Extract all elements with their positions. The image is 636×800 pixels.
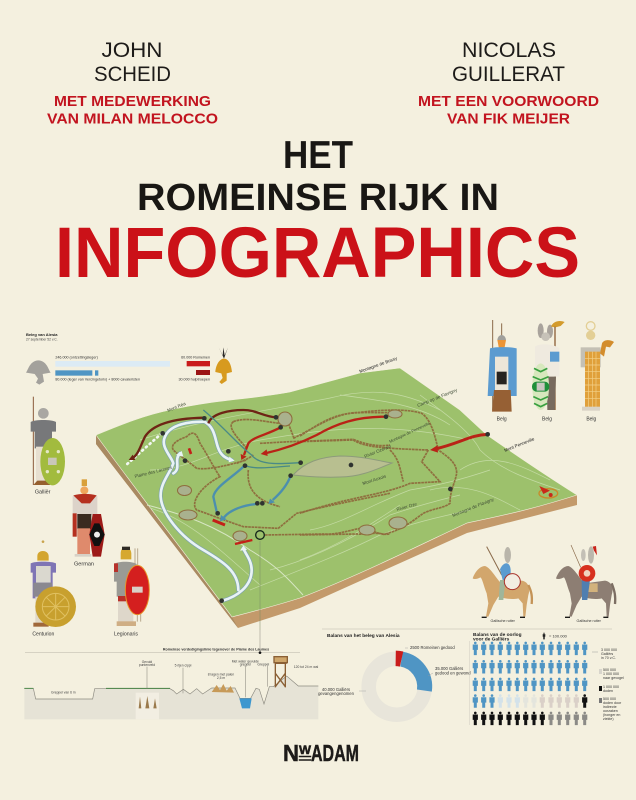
chart: beleg van Alesia troop numbers: 30.000 hulptroepen [178, 377, 210, 381]
cross-section of Roman defence line: 120 tot 24 m wal [294, 665, 318, 669]
cross-section of Roman defence line [24, 630, 318, 719]
author: Nicolas Guillerat: NICOLAS [462, 39, 556, 62]
cross-section of Roman defence line: 8 lagen met palen [208, 672, 234, 676]
rider: tan horse [473, 547, 532, 623]
chart: beleg van Alesia troop numbers [26, 332, 232, 385]
soldier: Legionaris: Legionaris [114, 631, 138, 637]
red arrow from the east [430, 432, 558, 498]
soldier: Legionaris [114, 547, 149, 637]
divider line right [322, 628, 612, 630]
map labels: Mont Réa [167, 401, 187, 413]
chart: beleg van Alesia troop numbers: 27 september 52 v.C. [26, 338, 58, 342]
plateau Alesia [293, 456, 392, 477]
contour lines [140, 392, 560, 595]
people rows: blue [473, 642, 587, 655]
stimuli pit [136, 693, 159, 719]
credit: voorwoord: MET EEN VOORWOORD [418, 93, 599, 110]
cross-section of Roman defence line: greppel [240, 663, 251, 667]
chart: beleg van Alesia troop numbers: 80.000 (leger van Vercingetorix) + 8000 cavaleristen [55, 377, 140, 381]
map labels: Camp op de Flavigny [417, 387, 458, 408]
publisher logo: ADAM [311, 740, 359, 766]
soldiers: left column [31, 397, 149, 637]
author: John Scheid: JOHN [102, 39, 162, 62]
title: ROMEINSE RIJK IN [137, 177, 499, 219]
rivers [125, 422, 252, 601]
bead line [125, 433, 162, 466]
cross-section of Roman defence line: Gevuld [142, 660, 152, 664]
author: John Scheid: SCHEID [94, 63, 171, 86]
map labels: Plaine des Laumes [134, 465, 173, 479]
chart: beleg van Alesia troop numbers: 60.000 Romeinen [181, 356, 210, 360]
publisher logo: W [299, 743, 312, 757]
pictogram legend: doden door [603, 701, 622, 705]
credit: voorwoord: VAN FIK MEIJER [447, 110, 570, 128]
chart: beleg van Alesia troop numbers: Beleg van Alesia [26, 332, 58, 337]
numbered markers [160, 414, 388, 603]
chart: verliezen donut: gevangengenomen [318, 691, 355, 696]
brushwood [212, 684, 234, 693]
map labels: Montagne de Pennevelle [388, 420, 431, 444]
cross-section of Roman defence line: puntenveld [139, 663, 155, 667]
donut segment: Gauls dead [402, 659, 425, 691]
soldier: Centurion: Centurion [32, 631, 54, 637]
cross-section of Roman defence line: Romeinse verdedigingslinie tegenover de Plaine des Laumes [163, 648, 269, 652]
author: Nicolas Guillerat [452, 39, 565, 86]
publisher logo [283, 740, 359, 766]
map block side [96, 435, 577, 628]
pictogram legend: 1 000 000 [603, 672, 619, 676]
camps [178, 410, 407, 541]
credit: met medewerking: VAN MILAN MELOCCO [47, 110, 218, 128]
map labels [134, 355, 536, 518]
rider: tan horse: Gallische ruiter [490, 619, 516, 623]
soldier: Belg with checked tunic: Belg [586, 417, 596, 423]
pictogram legend: Galliërs [601, 652, 613, 656]
soldier: Galliër [31, 397, 65, 496]
water ditch [239, 698, 252, 708]
map labels: Mont Auxois [362, 473, 387, 486]
pictogram legend: indirecte [603, 705, 617, 709]
red barriers [213, 520, 225, 525]
title [55, 134, 580, 293]
soldiers: Belgae [488, 320, 614, 423]
cavalry riders [473, 545, 615, 623]
chart: beleg van Alesia troop numbers: 246.000 (ontzettingsleger) [55, 356, 98, 360]
map labels: Rivier Ozerain [364, 443, 392, 459]
pictogram legend: doden [603, 689, 613, 693]
cross-section of Roman defence line: Greppel van 6 m [51, 690, 76, 694]
watch tower [274, 657, 287, 687]
chart: pictogram balance of Gallic war: = 100.000 [549, 634, 568, 638]
icon: gold helmet [215, 347, 232, 384]
people row five [473, 712, 587, 725]
map terrain [96, 368, 577, 617]
chart: verliezen donut: gedood en gewond [435, 670, 471, 676]
map labels: Montagne de Bussy [359, 355, 398, 374]
chart: pictogram balance of Gallic war: voor de Galliërs [473, 636, 510, 642]
credit: voorwoord [418, 93, 599, 128]
map labels: Rivier Oze [396, 501, 418, 512]
chart: verliezen donut: Balans van het beleg van Alesia [327, 633, 400, 639]
chart: verliezen donut [318, 633, 471, 715]
cross-section of Roman defence line: Greppel [257, 662, 270, 666]
pictogram legend: 3 000 000 [601, 648, 617, 652]
pictogram legend [592, 648, 624, 721]
army arrows [129, 410, 386, 544]
rider: grey horse: Gallische ruiter [576, 619, 602, 623]
chart: pictogram balance of Gallic war: Balans van de oorlog [473, 632, 522, 638]
icon: grey helmet [26, 360, 51, 385]
credit: met medewerking [47, 93, 218, 128]
chart: verliezen donut: 35.000 Galliërs [435, 666, 463, 671]
soldier: German [73, 479, 105, 567]
credit: met medewerking: MET MEDEWERKING [54, 93, 211, 110]
author: John Scheid [94, 39, 171, 86]
soldier: Belg with blue cape: Belg [497, 417, 507, 423]
soldier: Galliër: Galliër [35, 490, 51, 496]
map labels: Montagne de Flavigny [452, 496, 495, 518]
ground profile [24, 676, 318, 719]
map of the siege of Alesia [96, 355, 577, 630]
title: HET [283, 134, 353, 177]
pictogram legend: naar gevogel [603, 676, 624, 680]
cross-section of Roman defence line: 5 rijen cippi [175, 663, 192, 667]
leader line from ring to section [259, 541, 261, 630]
chart: pictogram balance of Gallic war [470, 632, 624, 725]
soldier: Belg with green shield: Belg [542, 417, 552, 423]
rider: grey horse [556, 545, 615, 623]
pictogram legend: oorzaken [603, 709, 618, 713]
cross-section of Roman defence line: Met water gevulde [232, 660, 259, 664]
people row four [473, 694, 587, 708]
pictogram legend: 500 000 [603, 697, 616, 701]
cross-section of Roman defence line: 2,5 m [217, 676, 225, 680]
publisher logo: N [283, 740, 299, 766]
pictogram legend: ziekte) [603, 717, 614, 721]
pictogram legend: (honger en [603, 713, 620, 717]
pictogram legend: 1 000 000 [603, 685, 619, 689]
white arrow heads [176, 451, 247, 551]
pictogram legend: in 70 v.C. [601, 656, 616, 660]
soldier: German: German [74, 561, 94, 567]
author: Nicolas Guillerat: GUILLERAT [452, 63, 565, 86]
soldier: Centurion [31, 540, 76, 637]
ring marker [256, 531, 264, 539]
donut segment: Romans dead [396, 651, 402, 667]
title: INFOGRAPHICS [55, 214, 580, 293]
fortification lines [172, 412, 390, 535]
map labels: Mont Penneville [504, 436, 536, 453]
chart: verliezen donut: 2500 Romeinen gedood [410, 645, 455, 650]
pictogram legend: 500 000 [603, 668, 616, 672]
chart: verliezen donut: 40.000 Galliërs [322, 687, 350, 692]
